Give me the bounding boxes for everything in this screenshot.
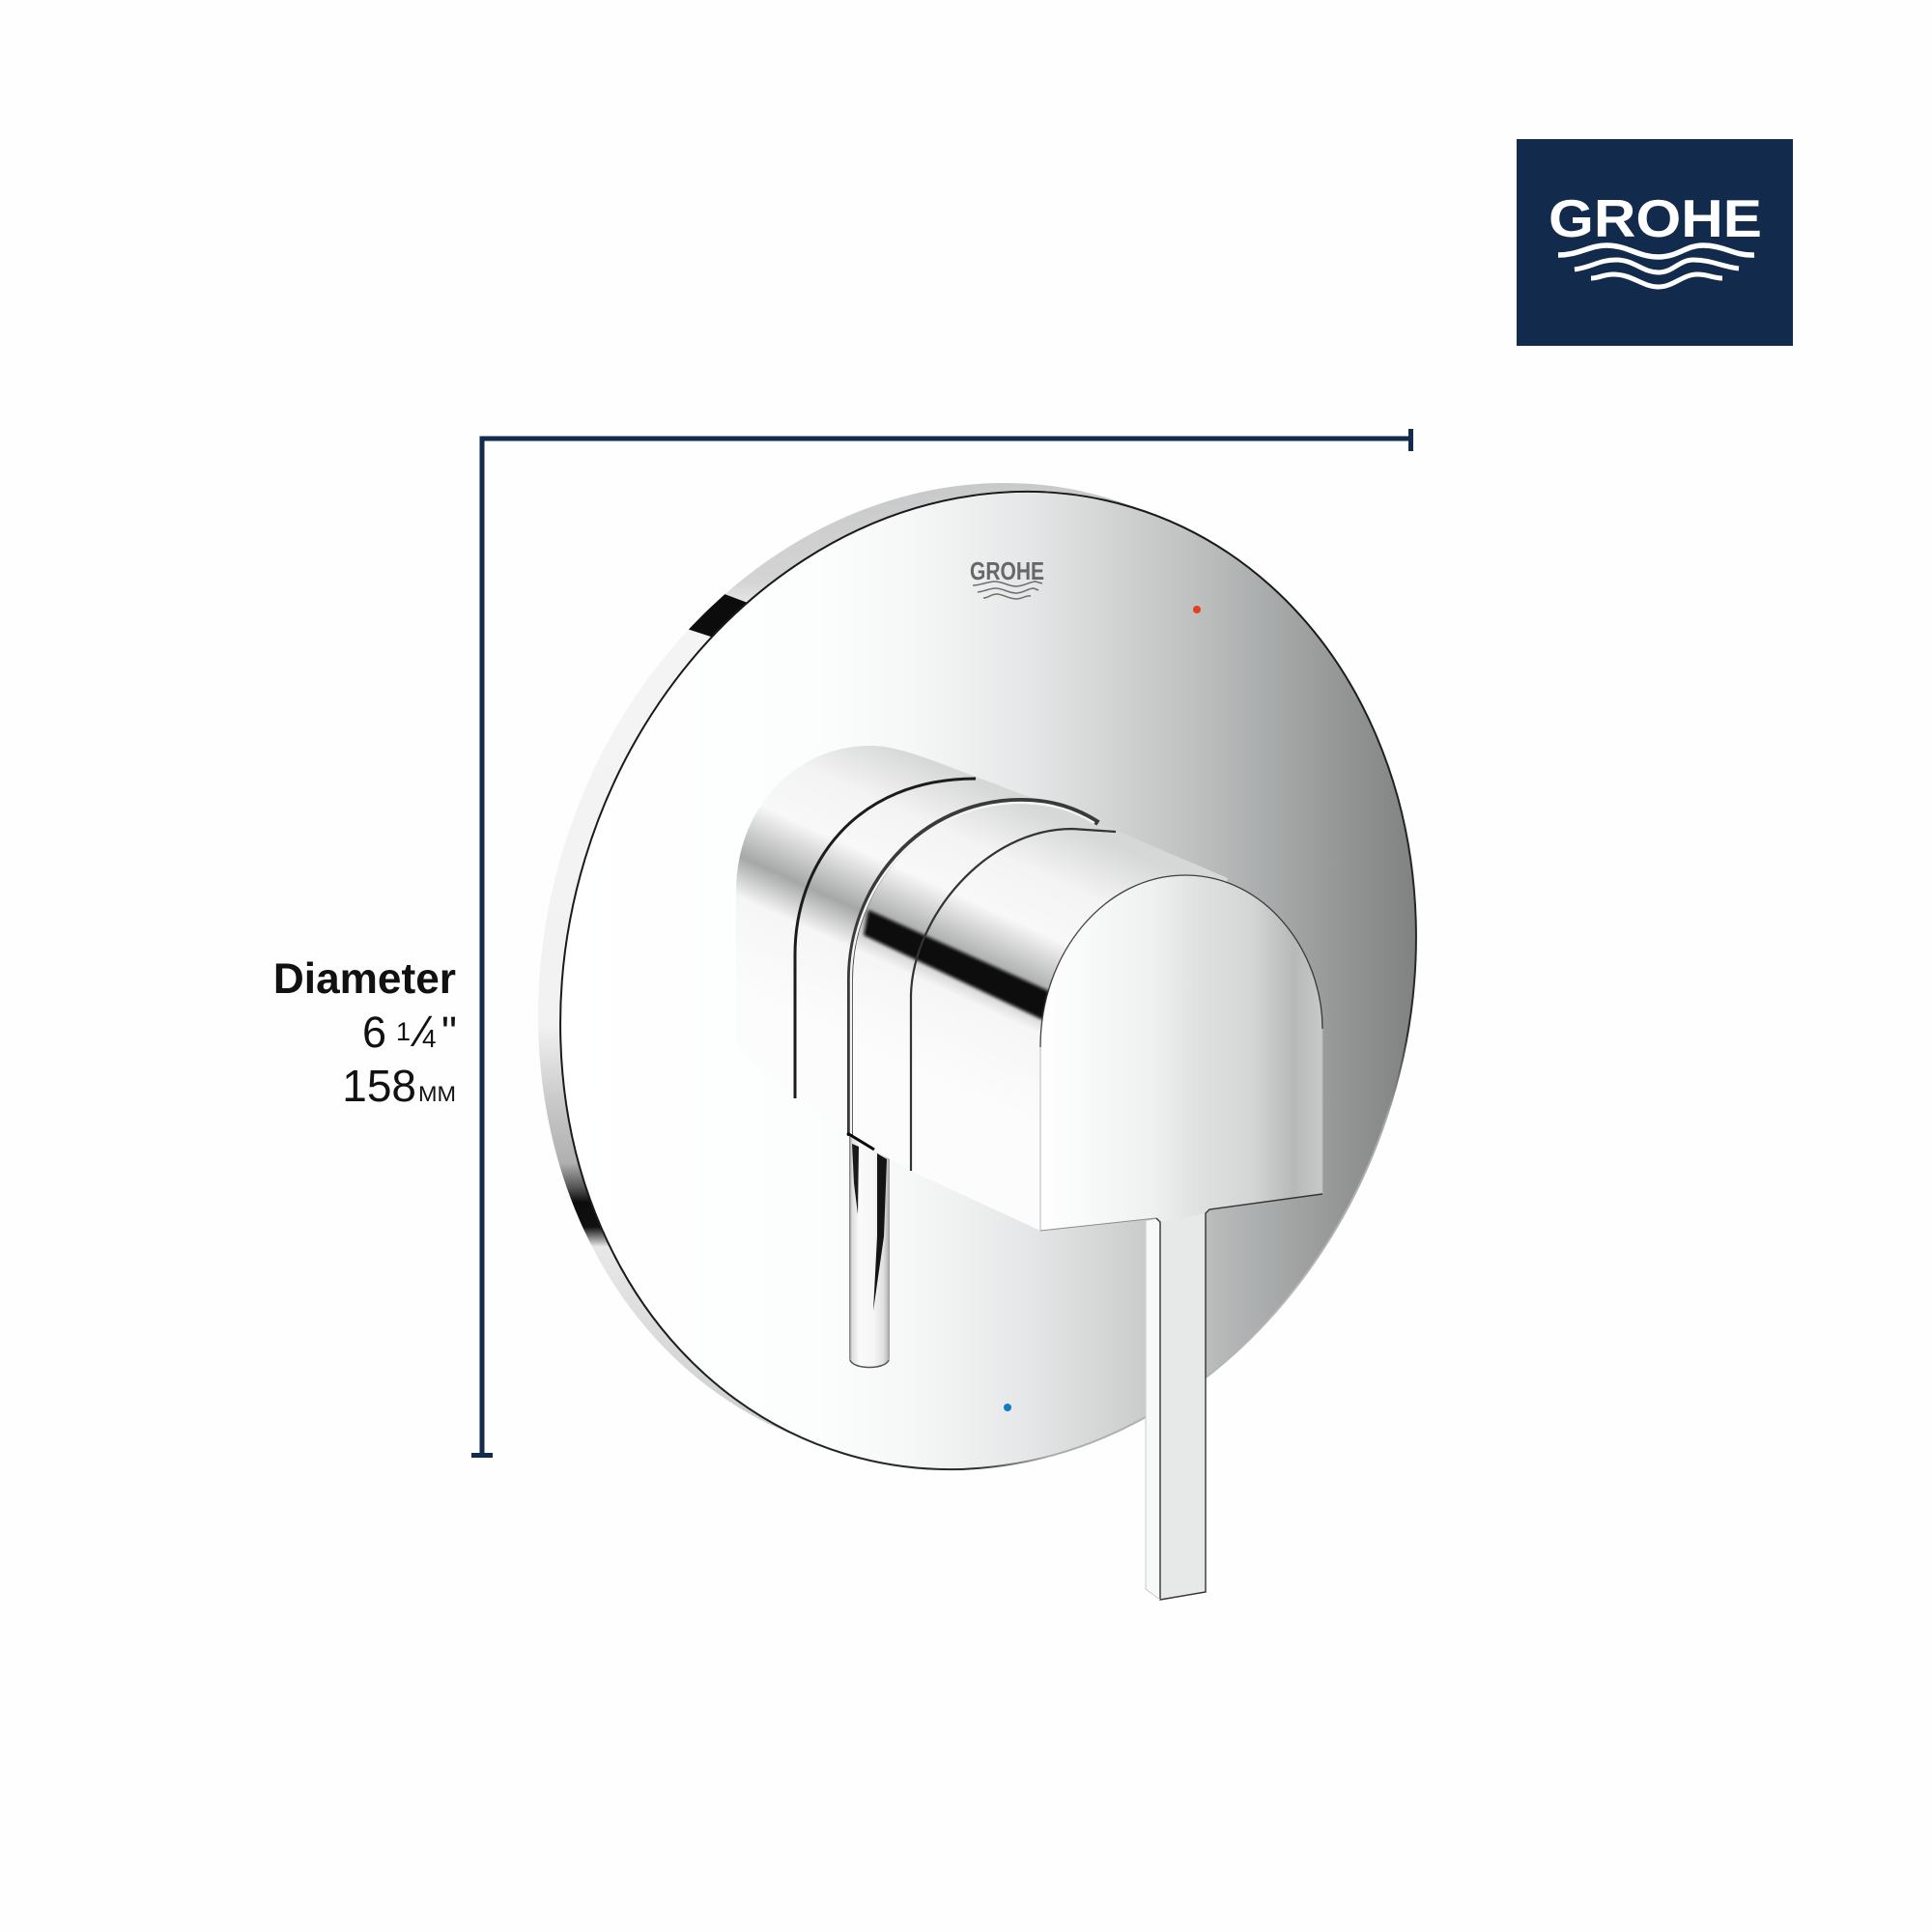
rim dark reflection — [688, 594, 746, 637]
diameter label: 1 — [396, 1017, 411, 1046]
diameter label: " — [441, 1008, 457, 1057]
front face bottom edge — [1040, 1218, 1156, 1231]
diameter label — [273, 955, 457, 1111]
GROHE logo: GROHE — [1548, 188, 1762, 248]
lever body shading — [1160, 1213, 1206, 1600]
engraved logo: GROHE — [970, 556, 1044, 585]
infographic canvas — [276, 139, 1793, 1601]
knob groove 2 — [847, 801, 1098, 1150]
diameter label: Diameter — [273, 955, 456, 1003]
diameter label: 6 — [362, 1008, 386, 1057]
lever side facet — [1146, 1219, 1160, 1600]
hot indicator dot — [1193, 606, 1201, 613]
front face top edge — [1040, 875, 1322, 1047]
knob front face and lever — [1040, 875, 1322, 1600]
knob groove 1 — [795, 779, 976, 1098]
disc face — [441, 384, 1535, 1577]
diverter pin — [849, 1136, 890, 1368]
knob groove 3 — [911, 829, 1116, 1171]
product: shower valve trim — [538, 483, 1417, 1601]
diameter label: ⁄ — [410, 1007, 433, 1056]
GROHE logo — [1517, 139, 1793, 346]
lever outline — [1156, 1194, 1322, 1600]
dimension bracket — [471, 429, 1413, 1458]
diameter label: MM — [418, 1082, 456, 1106]
knob body — [736, 746, 1228, 1231]
diameter label: 4 — [422, 1024, 436, 1053]
disc rim — [419, 376, 1513, 1568]
lever facet outline — [1146, 1221, 1160, 1600]
cold indicator dot — [1004, 1404, 1011, 1411]
knob black reflection — [864, 910, 1049, 1020]
front face side edges — [1040, 1029, 1322, 1231]
diameter label: 158 — [342, 1061, 416, 1111]
engraved logo — [970, 556, 1044, 599]
